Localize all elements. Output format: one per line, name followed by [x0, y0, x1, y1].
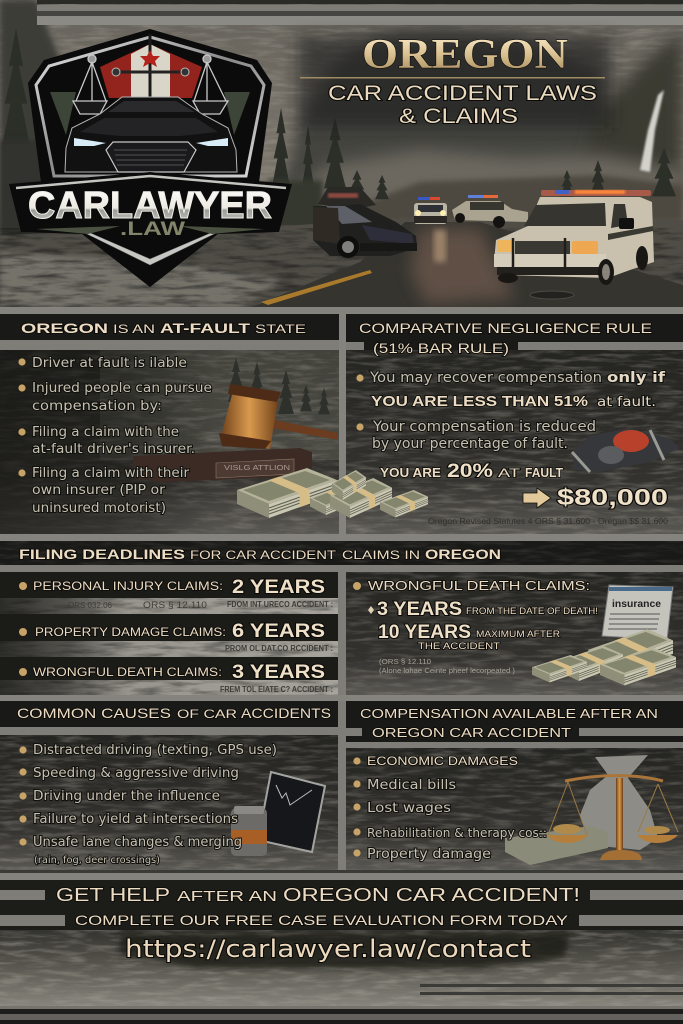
heading: OREGON CAR ACCIDENT [372, 725, 571, 740]
heading [17, 705, 331, 721]
citation: (ORS § 12.110 [379, 657, 431, 666]
green side panels [50, 92, 250, 135]
illustration: gavel, book and cash [133, 384, 360, 518]
bullet points: at fault. [597, 395, 656, 410]
wrecked car [313, 187, 417, 258]
footer call to action [0, 870, 683, 1024]
logo: CarLawyer.Law shield [9, 29, 292, 287]
ground [0, 218, 683, 308]
citation: (Alone lohae Ceinte pheef lecorpeated ) [379, 668, 515, 675]
row: wrongful death: FREM TOL EIATE C? ACCIDENT : [220, 685, 333, 694]
bullet list: Filing a claim with their [32, 466, 190, 481]
heading: OREGON [21, 320, 108, 336]
bullet list: at-fault driver's insurer. [32, 442, 195, 457]
illustration: cash [330, 470, 428, 518]
panel: comparative negligence rule [330, 307, 683, 535]
heading: filing deadlines [0, 534, 683, 572]
wordmark: CarLawyer: CARLAWYER [28, 185, 272, 227]
panel: filing deadlines left [0, 572, 346, 700]
bullet list: Rehabilitation & therapy cos:: [367, 826, 547, 840]
amount: $80,000 [557, 484, 668, 510]
row: property damage [19, 621, 333, 653]
row: wrongful death: 3 YEARS [232, 662, 325, 683]
three-year limit: FROM THE DATE OF DEATH! [466, 606, 598, 617]
heading: filing deadlines: CLAIMS IN [342, 548, 420, 562]
hero scene [0, 0, 683, 308]
bullet list: Lost wages [367, 801, 451, 816]
example: 20 percent at fault [380, 461, 563, 482]
row: wrongful death [19, 662, 333, 694]
three-year limit: 3 YEARS [377, 599, 462, 620]
statute citation: Oregon Revised Statutes 4 ORS § 31.600 - Oregan $$ 31.600 [428, 516, 668, 526]
heading: COMMON CAUSES [17, 705, 171, 721]
headline: GET HELP [56, 885, 170, 905]
arrow [523, 488, 551, 508]
heading: STATE [255, 322, 306, 336]
bullet points: YOU ARE LESS THAN 51% [371, 393, 588, 410]
illustration: insurance document and cash: insurance [612, 599, 661, 610]
illustration: insurance document and cash [532, 585, 676, 686]
row: property damage: PROM OL DAT.CO RCCIDENT : [225, 644, 333, 653]
heading [21, 320, 306, 336]
bullet points: You may recover compensation [369, 370, 602, 386]
mountains [0, 0, 683, 240]
bullet list: own insurer (PIP or [32, 483, 166, 498]
red and white crest [100, 34, 202, 98]
bullet list: compensation by: [32, 399, 162, 414]
bullet list [18, 356, 212, 516]
panel: compensation [346, 701, 683, 870]
bullet list: Distracted driving (texting, GPS use) [33, 743, 277, 758]
contact URL: https://carlawyer.law/contact [125, 935, 531, 963]
row: personal injury: 2 YEARS [232, 577, 325, 598]
bullet list: Injured people can pursue [32, 381, 212, 396]
bullet points [356, 370, 666, 452]
example: 20 percent at fault: AT [498, 466, 521, 480]
bullet points: by your percentage of fault. [372, 436, 568, 452]
row: personal injury: FDOM INT URECO ACCIDENT : [227, 600, 333, 609]
bullet list: ECONOMIC DAMAGES [367, 754, 518, 768]
heading: COMPENSATION AVAILABLE AFTER AN [360, 706, 658, 721]
panel: wrongful death claims [346, 572, 683, 696]
ten-year maximum: THE ACCIDENT [418, 641, 500, 652]
row: personal injury: ORS 032.06 [68, 601, 113, 610]
heading: WRONGFUL DEATH CLAIMS: [368, 578, 590, 593]
heading [359, 320, 652, 356]
row: property damage: 6 YEARS [232, 621, 325, 642]
sub-headline: COMPLETE OUR FREE CASE EVALUATION FORM TODAY [75, 912, 569, 928]
illustration: phone and bottle [231, 772, 325, 856]
heading: filing deadlines: FOR CAR ACCIDENT [190, 548, 337, 562]
bullet list: Filing a claim with the [32, 425, 179, 440]
bullet list: Unsafe lane changes & merging [33, 835, 242, 850]
headline: OREGON CAR ACCIDENT! [283, 885, 580, 905]
bullet list: uninsured motorist) [32, 501, 166, 516]
bullet list [353, 754, 547, 862]
example: 20 percent at fault: YOU ARE [380, 465, 441, 480]
banner [9, 172, 292, 287]
headline: AFTER AN [177, 888, 277, 905]
illustration: money bag, cash and brass scales [505, 755, 678, 865]
row: property damage: PROPERTY DAMAGE CLAIMS: [35, 625, 226, 639]
panel: Oregon is an at-fault state [0, 307, 683, 534]
heading: ACCIDENTS [241, 705, 331, 721]
bullet list: Medical bills [367, 778, 456, 793]
heading: OF CAR [177, 707, 237, 721]
bullet list: (rain, fog, deer crossings) [34, 855, 160, 866]
headline [56, 885, 580, 905]
title block [298, 32, 612, 128]
bullet list: Failure to yield at intersections [33, 812, 238, 827]
ten-year maximum: MAXIMUM AFTER [476, 629, 560, 640]
row: personal injury: PERSONAL INJURY CLAIMS: [33, 579, 223, 593]
illustration: deployed airbag [572, 428, 680, 472]
ambulance [494, 190, 654, 285]
bullet points: Your compensation is reduced [372, 419, 596, 435]
heading: COMPARATIVE NEGLIGENCE RULE [359, 320, 652, 336]
ten-year maximum [378, 622, 560, 652]
bullet points: only if [607, 370, 666, 386]
forest trees [0, 28, 676, 250]
heading: AT-FAULT [160, 320, 251, 336]
wordmark: .Law: .LAW [120, 219, 185, 240]
subtitle line 2: & CLAIMS [399, 105, 518, 128]
panel: common causes [0, 695, 683, 870]
heading [360, 706, 658, 740]
citation [379, 657, 515, 675]
heading: filing deadlines: FILING DEADLINES [19, 546, 185, 562]
wet road [250, 222, 683, 308]
heading: IS AN [113, 322, 155, 336]
heading: (51% BAR RULE) [373, 340, 509, 356]
illustration: gavel, book and cash: VISLG ATTLION [224, 465, 290, 472]
bullet list [19, 743, 277, 866]
ten-year maximum: 10 YEARS [378, 622, 471, 643]
heading: filing deadlines: OREGON [425, 546, 501, 562]
example: 20 percent at fault: 20% [447, 461, 493, 482]
three-year limit [368, 599, 598, 620]
top banner stripes [37, 0, 683, 25]
row: personal injury: ORS § 12.110 [143, 600, 207, 611]
row: wrongful death: WRONGFUL DEATH CLAIMS: [33, 665, 222, 679]
bullet list: Speeding & aggressive driving [33, 766, 239, 781]
police cars [414, 195, 528, 228]
title: Oregon: OREGON [362, 32, 568, 78]
bullet list: Driver at fault is ilable [32, 356, 187, 371]
bullet list: Driving under the influence [33, 789, 220, 804]
bullet list: Property damage [367, 847, 491, 862]
car front [65, 97, 237, 172]
scales of justice [73, 55, 228, 114]
example: 20 percent at fault: FAULT [525, 465, 563, 480]
row: personal injury [19, 577, 333, 611]
waterfall [640, 90, 664, 172]
subtitle line 1: CAR ACCIDENT LAWS [328, 82, 597, 105]
